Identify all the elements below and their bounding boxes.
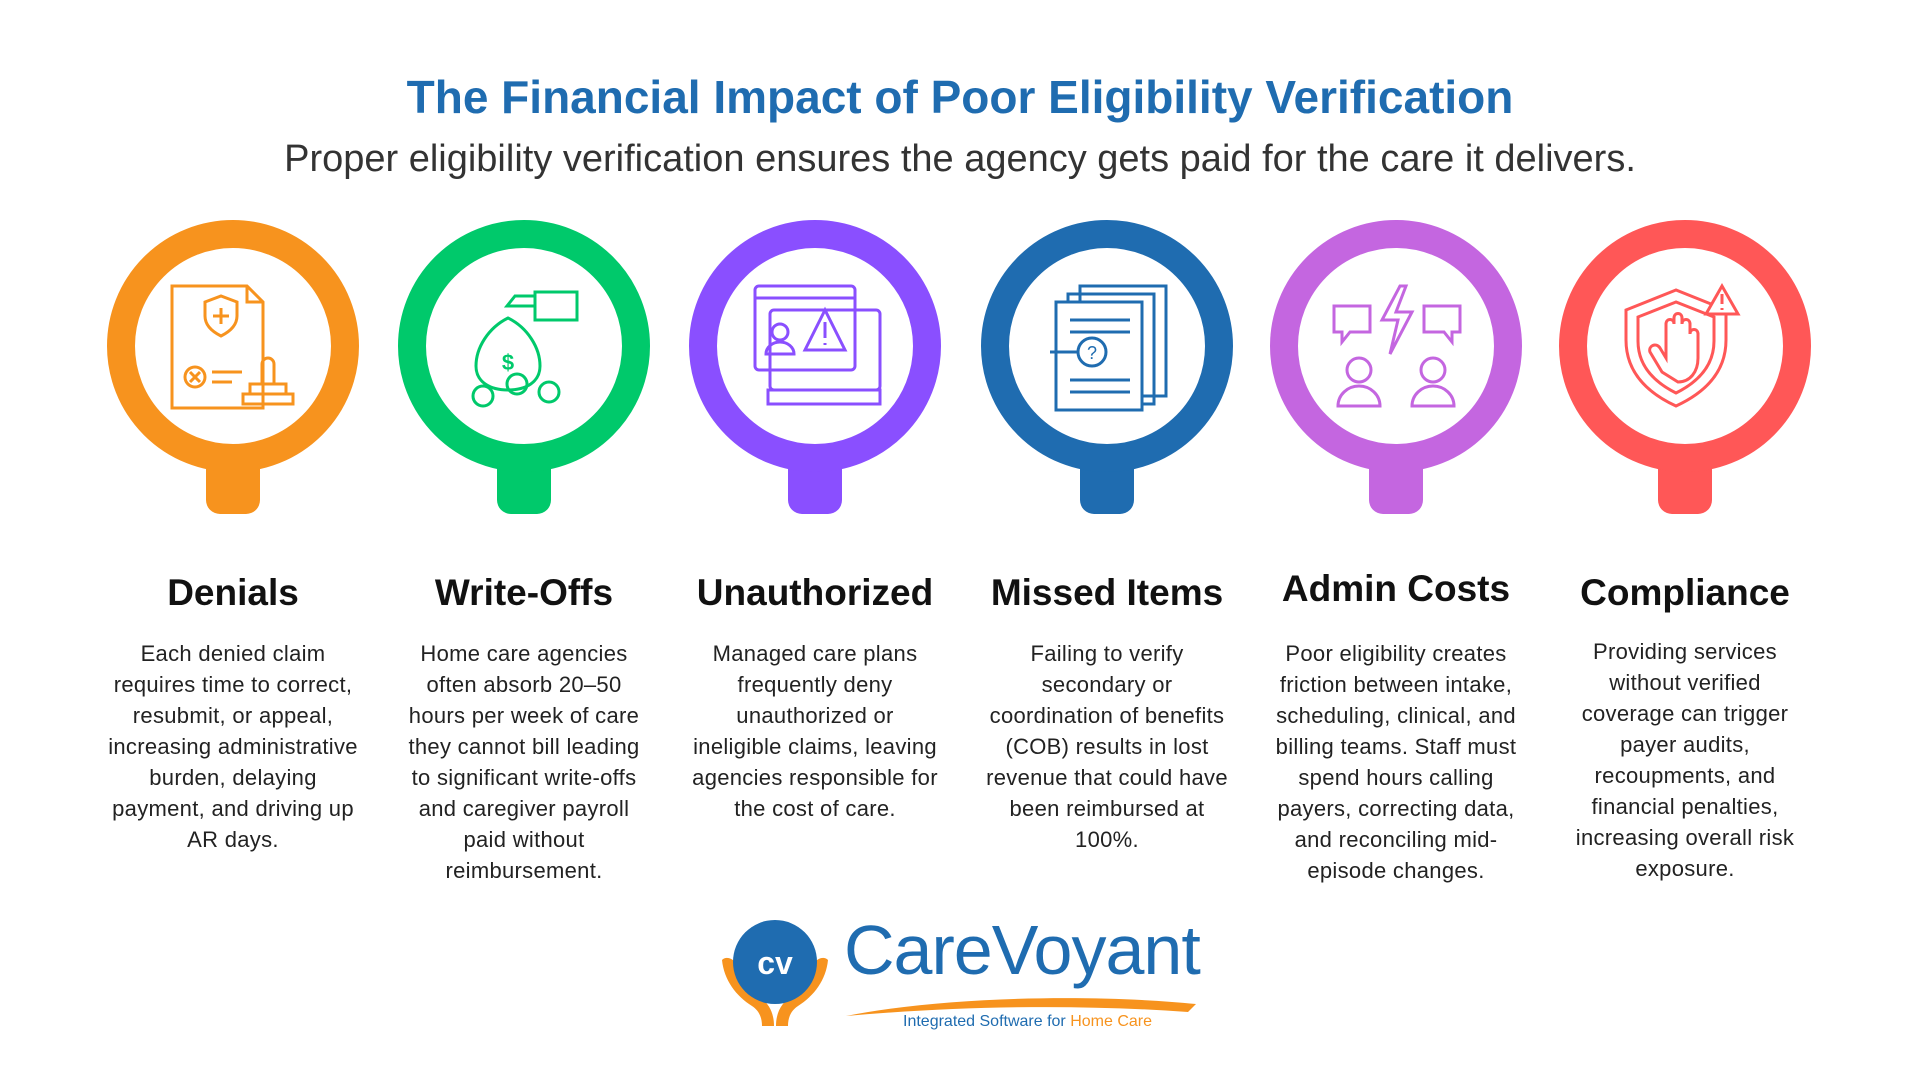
panel: unauthorized: Managed care plans frequently deny unauthorized or ineligible claims, leaving agencies responsible for the cost of care. <box>692 641 938 821</box>
icon: compliance shield <box>1573 234 1797 514</box>
panel: write-offs: Write-Offs <box>435 572 613 613</box>
icon: admin costs people <box>1284 234 1508 514</box>
subtitle: Proper eligibility verification ensures the agency gets paid for the care it delivers. <box>284 138 1636 180</box>
logo: Integrated Software for Home Care <box>903 1013 1152 1030</box>
panel: unauthorized: Unauthorized <box>697 572 933 613</box>
panel: denials: Denials <box>167 572 299 613</box>
panel: admin costs: Poor eligibility creates friction between intake, scheduling, clinical, and billing teams. Staff must spend hours calling payers, correcting data, and reconciling mid-episode changes. <box>1276 641 1516 883</box>
logo <box>722 911 1200 1030</box>
panel: missed items: Missed Items <box>991 572 1223 613</box>
panel: compliance: Providing services without verified coverage can trigger payer audits, recoupments, and financial penalties, increasing overall risk exposure. <box>1576 639 1794 881</box>
icon: denials badge <box>121 234 345 514</box>
icon: write-offs money bag <box>412 234 636 514</box>
logo: cv <box>757 945 793 981</box>
icon: unauthorized laptop <box>703 234 927 514</box>
panel: admin costs: Admin Costs <box>1282 568 1510 609</box>
panel: write-offs: Home care agencies often absorb 20–50 hours per week of care they cannot bill leading to significant write-offs and caregiver payroll paid without reimbursement. <box>408 641 640 883</box>
icon: write-offs money bag: $ <box>502 350 514 375</box>
title: The Financial Impact of Poor Eligibility Verification <box>407 71 1513 123</box>
panel: missed items: Failing to verify secondary or coordination of benefits (COB) results in lost revenue that could have been reimbursed at 100%. <box>986 641 1228 852</box>
icon: missed items documents: ? <box>1087 343 1097 363</box>
icon row <box>107 220 1811 514</box>
logo: CareVoyant <box>844 911 1200 989</box>
icon: missed items documents <box>995 234 1219 514</box>
panel: denials: Each denied claim requires time to correct, resubmit, or appeal, increasing administrative burden, delaying payment, and driving up AR days. <box>108 641 358 852</box>
panel: compliance: Compliance <box>1580 572 1790 613</box>
